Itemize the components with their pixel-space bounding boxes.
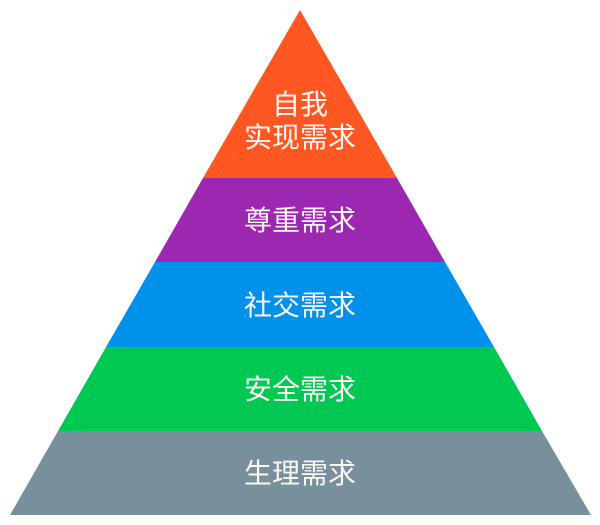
tier: self-actualization needs: 自我 <box>272 89 328 120</box>
tier: esteem needs <box>155 178 445 262</box>
tier: social needs <box>106 262 494 347</box>
tier: social needs: 社交需求 <box>244 290 356 321</box>
tier: physiological needs: 生理需求 <box>244 458 356 489</box>
tier: physiological needs <box>10 431 591 515</box>
tier: safety needs: 安全需求 <box>244 374 356 405</box>
tier: self-actualization needs: 实现需求 <box>244 122 356 153</box>
tier: esteem needs: 尊重需求 <box>244 205 356 236</box>
tier: self-actualization needs <box>203 10 397 178</box>
tier: safety needs <box>58 347 542 431</box>
